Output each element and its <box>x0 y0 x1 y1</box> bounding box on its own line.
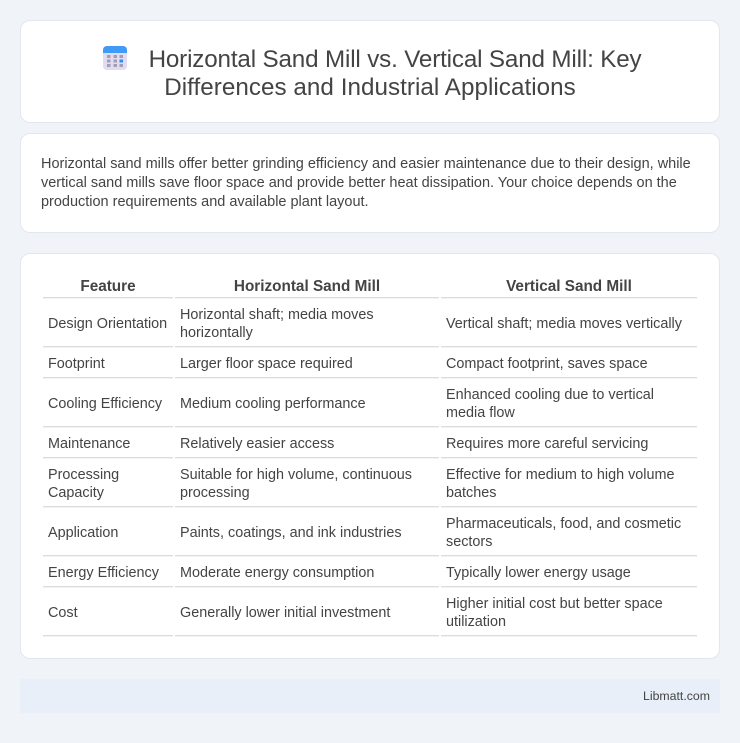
title: Horizontal Sand Mill vs. Vertical Sand Mill: Key <box>149 46 641 73</box>
cooling vertical <box>446 387 654 421</box>
intro text <box>41 156 691 210</box>
application vertical: sectors <box>446 534 492 550</box>
processing vertical: batches <box>446 485 496 501</box>
cost vertical <box>446 596 663 630</box>
design orientation horizontal: horizontally <box>180 325 253 341</box>
row: design orientation: Design Orientation <box>48 316 167 332</box>
row: maintenance: Maintenance <box>48 436 130 452</box>
design orientation vertical: Vertical shaft; media moves vertically <box>446 316 682 332</box>
row: processing capacity: Capacity <box>48 485 104 501</box>
row: application: Application <box>48 525 118 541</box>
cooling vertical: media flow <box>446 405 515 421</box>
application vertical <box>446 516 681 550</box>
processing vertical: Effective for medium to high volume <box>446 467 674 483</box>
title panel <box>20 20 720 123</box>
row: cost: Cost <box>48 605 78 621</box>
application vertical: Pharmaceuticals, food, and cosmetic <box>446 516 681 532</box>
design orientation horizontal: Horizontal shaft; media moves <box>180 307 374 323</box>
processing vertical <box>446 467 674 501</box>
comparison table panel <box>20 253 720 659</box>
maintenance horizontal: Relatively easier access <box>180 436 334 452</box>
row: energy efficiency: Energy Efficiency <box>48 565 159 581</box>
design orientation horizontal <box>180 307 374 341</box>
footprint vertical: Compact footprint, saves space <box>446 356 648 372</box>
cost vertical: Higher initial cost but better space <box>446 596 663 612</box>
table header: horizontal sand mill: Horizontal Sand Mill <box>234 278 380 295</box>
table <box>43 278 697 637</box>
title <box>149 46 642 101</box>
maintenance vertical: Requires more careful servicing <box>446 436 648 452</box>
icon: calendar grid <box>103 46 127 70</box>
intro panel <box>20 133 720 233</box>
footer bar <box>20 679 720 713</box>
intro text: production requirements and available plant layout. <box>41 194 369 210</box>
processing horizontal: Suitable for high volume, continuous <box>180 467 412 483</box>
table header: vertical sand mill: Vertical Sand Mill <box>506 278 632 295</box>
processing horizontal: processing <box>180 485 250 501</box>
application horizontal: Paints, coatings, and ink industries <box>180 525 402 541</box>
row: processing capacity: Processing <box>48 467 119 483</box>
table header: feature: Feature <box>80 278 136 295</box>
row: footprint: Footprint <box>48 356 105 372</box>
processing horizontal <box>180 467 412 501</box>
cost vertical: utilization <box>446 614 506 630</box>
row: cooling efficiency: Cooling Efficiency <box>48 396 162 412</box>
cooling vertical: Enhanced cooling due to vertical <box>446 387 654 403</box>
footer credit: Libmatt.com <box>643 689 710 703</box>
intro text: vertical sand mills save floor space and provide better heat dissipation. Your choice depends on the <box>41 175 677 191</box>
footprint horizontal: Larger floor space required <box>180 356 353 372</box>
intro text: Horizontal sand mills offer better grinding efficiency and easier maintenance due to their design, while <box>41 156 691 172</box>
title: Differences and Industrial Applications <box>164 74 576 101</box>
energy horizontal: Moderate energy consumption <box>180 565 374 581</box>
row: processing capacity <box>48 467 119 501</box>
cooling horizontal: Medium cooling performance <box>180 396 366 412</box>
cost horizontal: Generally lower initial investment <box>180 605 390 621</box>
energy vertical: Typically lower energy usage <box>446 565 631 581</box>
